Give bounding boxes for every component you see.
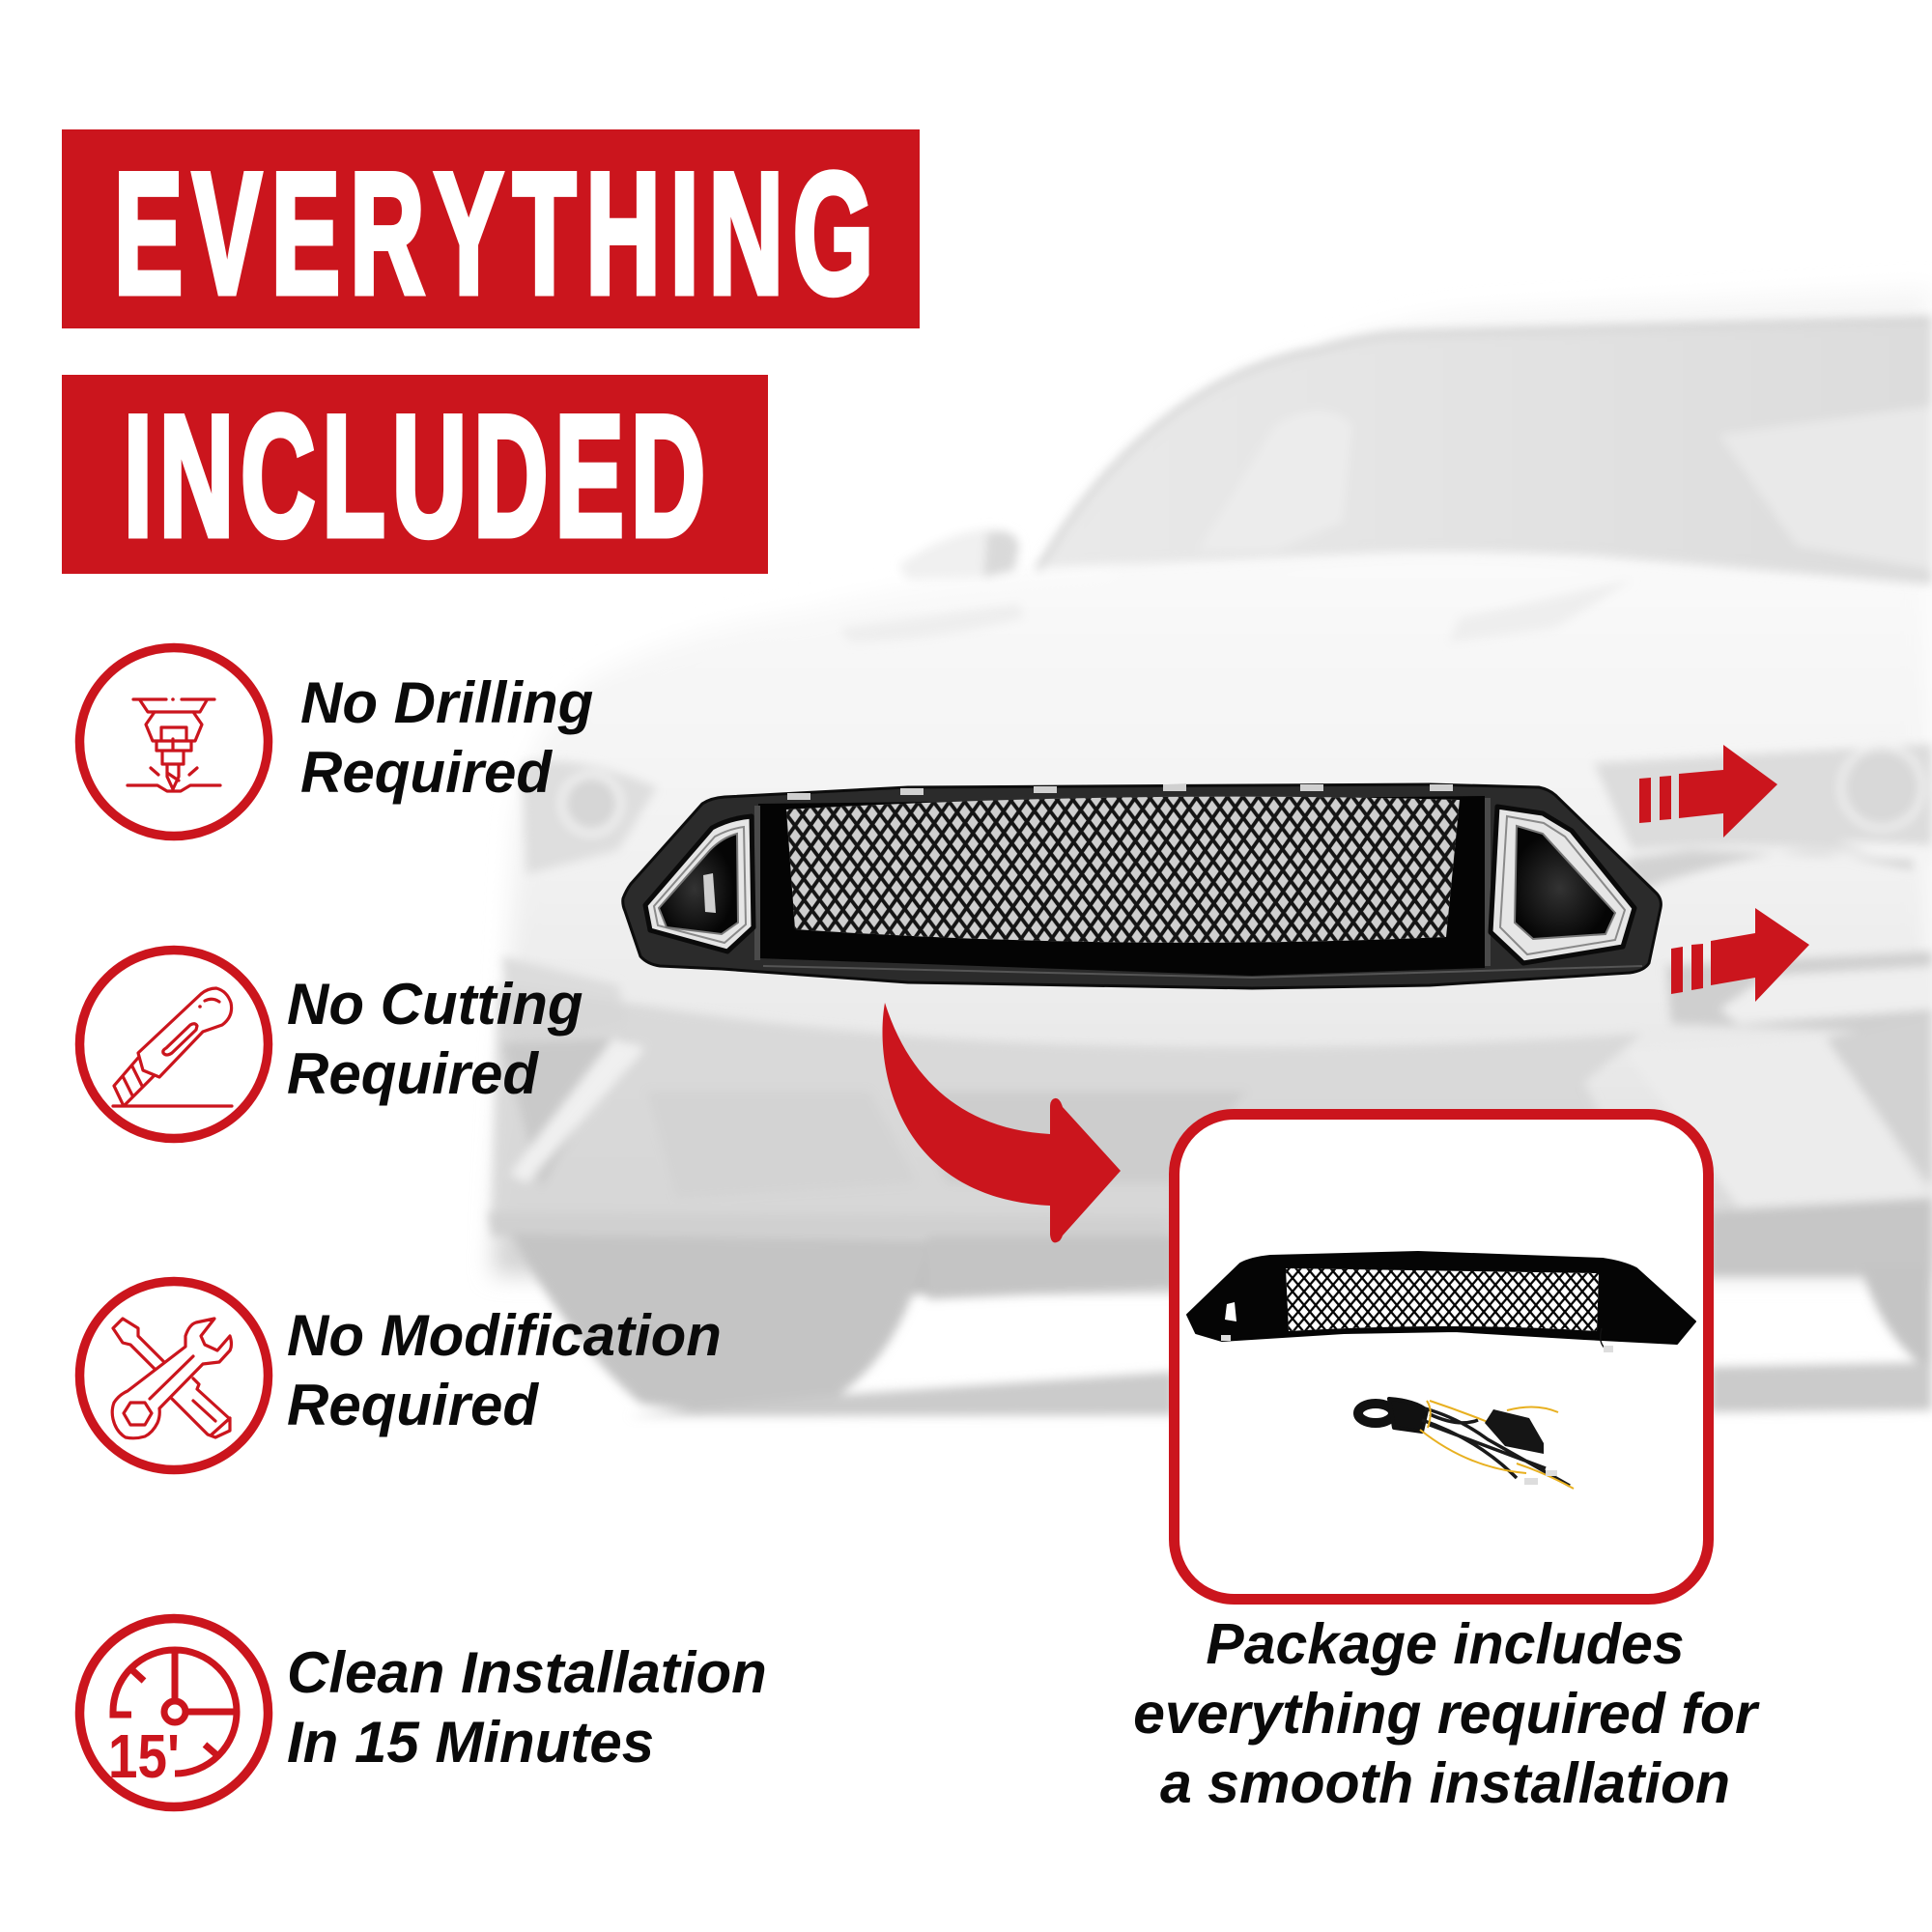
feature: clean installation — [79, 1619, 767, 1806]
main LED grille — [623, 782, 1661, 988]
product photo: wiring harness — [1358, 1399, 1574, 1489]
icon: fifteen minute timer — [79, 1619, 269, 1806]
arrow: upper right — [1639, 745, 1777, 838]
fog / DRL strips — [1666, 952, 1932, 1034]
package caption: a smooth installation — [1160, 1751, 1730, 1815]
grille frame — [623, 784, 1661, 988]
icon: utility knife — [79, 951, 269, 1138]
label: no drilling required: Required — [300, 740, 553, 805]
left headlight — [522, 761, 657, 874]
product photo: grille rear — [1187, 1252, 1695, 1352]
arrow: lower right — [1671, 908, 1809, 1002]
lower bumper — [493, 985, 1932, 1294]
label: no modification required: No Modification — [287, 1303, 722, 1368]
left LED surround — [645, 816, 753, 952]
label: no drilling required: No Drilling — [300, 670, 593, 735]
icon: drill — [79, 647, 269, 837]
feature: no drilling — [79, 647, 593, 837]
icon: wrench and screwdriver — [79, 1281, 269, 1470]
grille centre opening — [758, 796, 1485, 976]
feature: no modification — [79, 1281, 722, 1470]
icon: fifteen minute timer: 15' — [108, 1721, 180, 1791]
background car photo, faded — [488, 288, 1932, 1416]
tyres — [511, 1234, 926, 1410]
ground — [628, 1372, 1174, 1416]
label: no modification required: Required — [287, 1373, 539, 1437]
package contents panel — [1175, 1115, 1708, 1600]
feature: no cutting — [79, 951, 583, 1138]
windshield — [1041, 321, 1932, 584]
package caption: Package includes — [1206, 1612, 1685, 1676]
right headlight — [1594, 744, 1932, 860]
label: no cutting required: No Cutting — [287, 972, 583, 1037]
grille mesh — [786, 796, 1460, 943]
package caption: everything required for — [1133, 1682, 1760, 1746]
mounting clips — [787, 784, 1453, 800]
curved arrow to package — [883, 1003, 1121, 1242]
right LED surround — [1491, 807, 1634, 963]
label: clean installation: Clean Installation — [287, 1640, 767, 1705]
title banner: INCLUDED: INCLUDED — [124, 381, 712, 573]
title banner: EVERYTHING: EVERYTHING — [114, 138, 883, 330]
label: clean installation: In 15 Minutes — [287, 1710, 654, 1775]
label: no cutting required: Required — [287, 1041, 539, 1106]
